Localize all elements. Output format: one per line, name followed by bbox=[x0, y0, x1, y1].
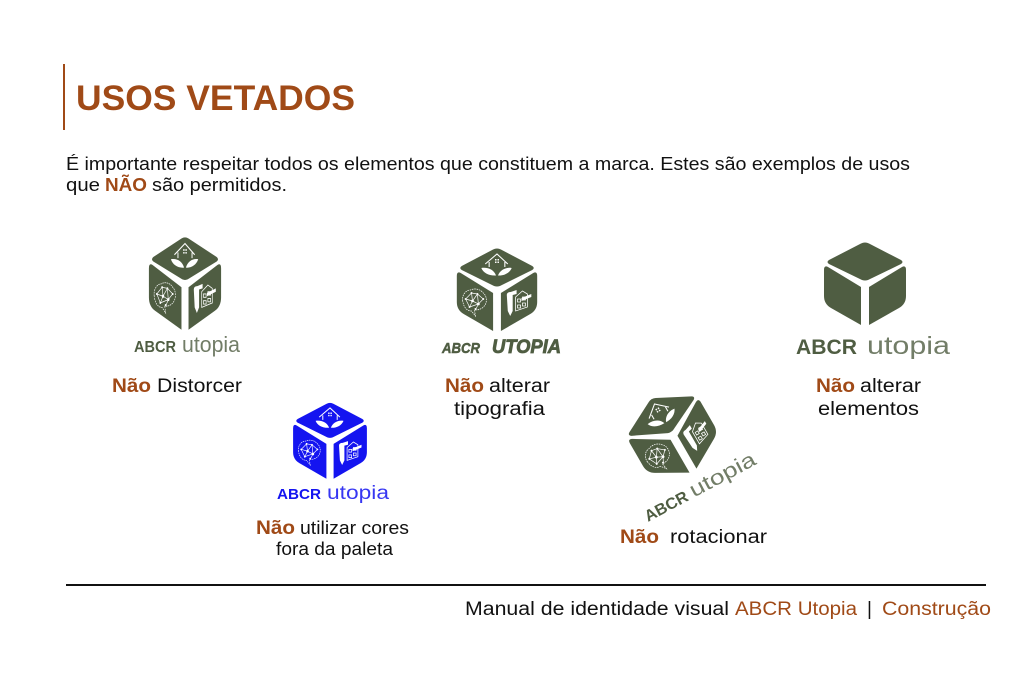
caption: cores fora da paleta: Não bbox=[256, 518, 295, 539]
caption: alterar tipografia: tipografia bbox=[454, 399, 545, 420]
title: USOS VETADOS bbox=[76, 79, 355, 118]
footer: Construção bbox=[882, 599, 991, 620]
logo: off-palette colour: ABCR bbox=[277, 486, 321, 503]
caption: distorcer: Não bbox=[112, 376, 151, 397]
caption: cores fora da paleta: fora da paleta bbox=[276, 539, 394, 559]
caption: alterar elementos: elementos bbox=[818, 399, 919, 420]
logo: elements removed: ABCR bbox=[796, 336, 857, 359]
logo: rotated: utopia bbox=[685, 448, 760, 502]
footer bbox=[465, 599, 991, 620]
caption: cores fora da paleta: utilizar cores bbox=[300, 518, 409, 538]
caption: rotacionar: rotacionar bbox=[670, 527, 768, 548]
logo: rotated: ABCR bbox=[642, 488, 692, 526]
caption: distorcer bbox=[112, 376, 243, 397]
logo: altered typography: ABCR bbox=[441, 340, 480, 357]
caption: rotacionar: Não bbox=[620, 527, 659, 548]
logo: altered typography: UTOPIA bbox=[492, 337, 561, 358]
footer: ABCR Utopia bbox=[735, 599, 857, 620]
intro text: que bbox=[66, 175, 100, 195]
footer: | bbox=[867, 599, 872, 620]
caption: alterar elementos: Não bbox=[816, 376, 855, 397]
caption: rotacionar bbox=[620, 527, 768, 548]
intro text bbox=[66, 154, 910, 195]
intro text: É importante respeitar todos os elementos que constituem a marca. Estes são exemplos de usos bbox=[66, 154, 910, 174]
logo: distorted: utopia bbox=[182, 332, 241, 357]
footer: Manual de identidade visual bbox=[465, 599, 729, 620]
intro text: são permitidos. bbox=[152, 175, 287, 195]
logo: altered typography bbox=[441, 248, 561, 358]
logo: elements removed bbox=[796, 242, 950, 360]
caption: cores fora da paleta bbox=[256, 518, 409, 559]
intro text: NÃO bbox=[105, 174, 147, 195]
caption: alterar tipografia bbox=[445, 376, 551, 420]
caption: alterar elementos bbox=[816, 376, 922, 420]
logo: rotated bbox=[616, 379, 760, 526]
logo: distorted bbox=[134, 237, 241, 357]
logo: off-palette colour bbox=[277, 403, 390, 504]
logo: distorted: ABCR bbox=[134, 339, 176, 356]
caption: distorcer: Distorcer bbox=[157, 376, 243, 397]
logo: elements removed: utopia bbox=[867, 332, 950, 360]
caption: alterar tipografia: alterar bbox=[489, 376, 551, 397]
logo: off-palette colour: utopia bbox=[327, 483, 390, 504]
caption: alterar elementos: alterar bbox=[860, 376, 922, 397]
caption: alterar tipografia: Não bbox=[445, 376, 484, 397]
